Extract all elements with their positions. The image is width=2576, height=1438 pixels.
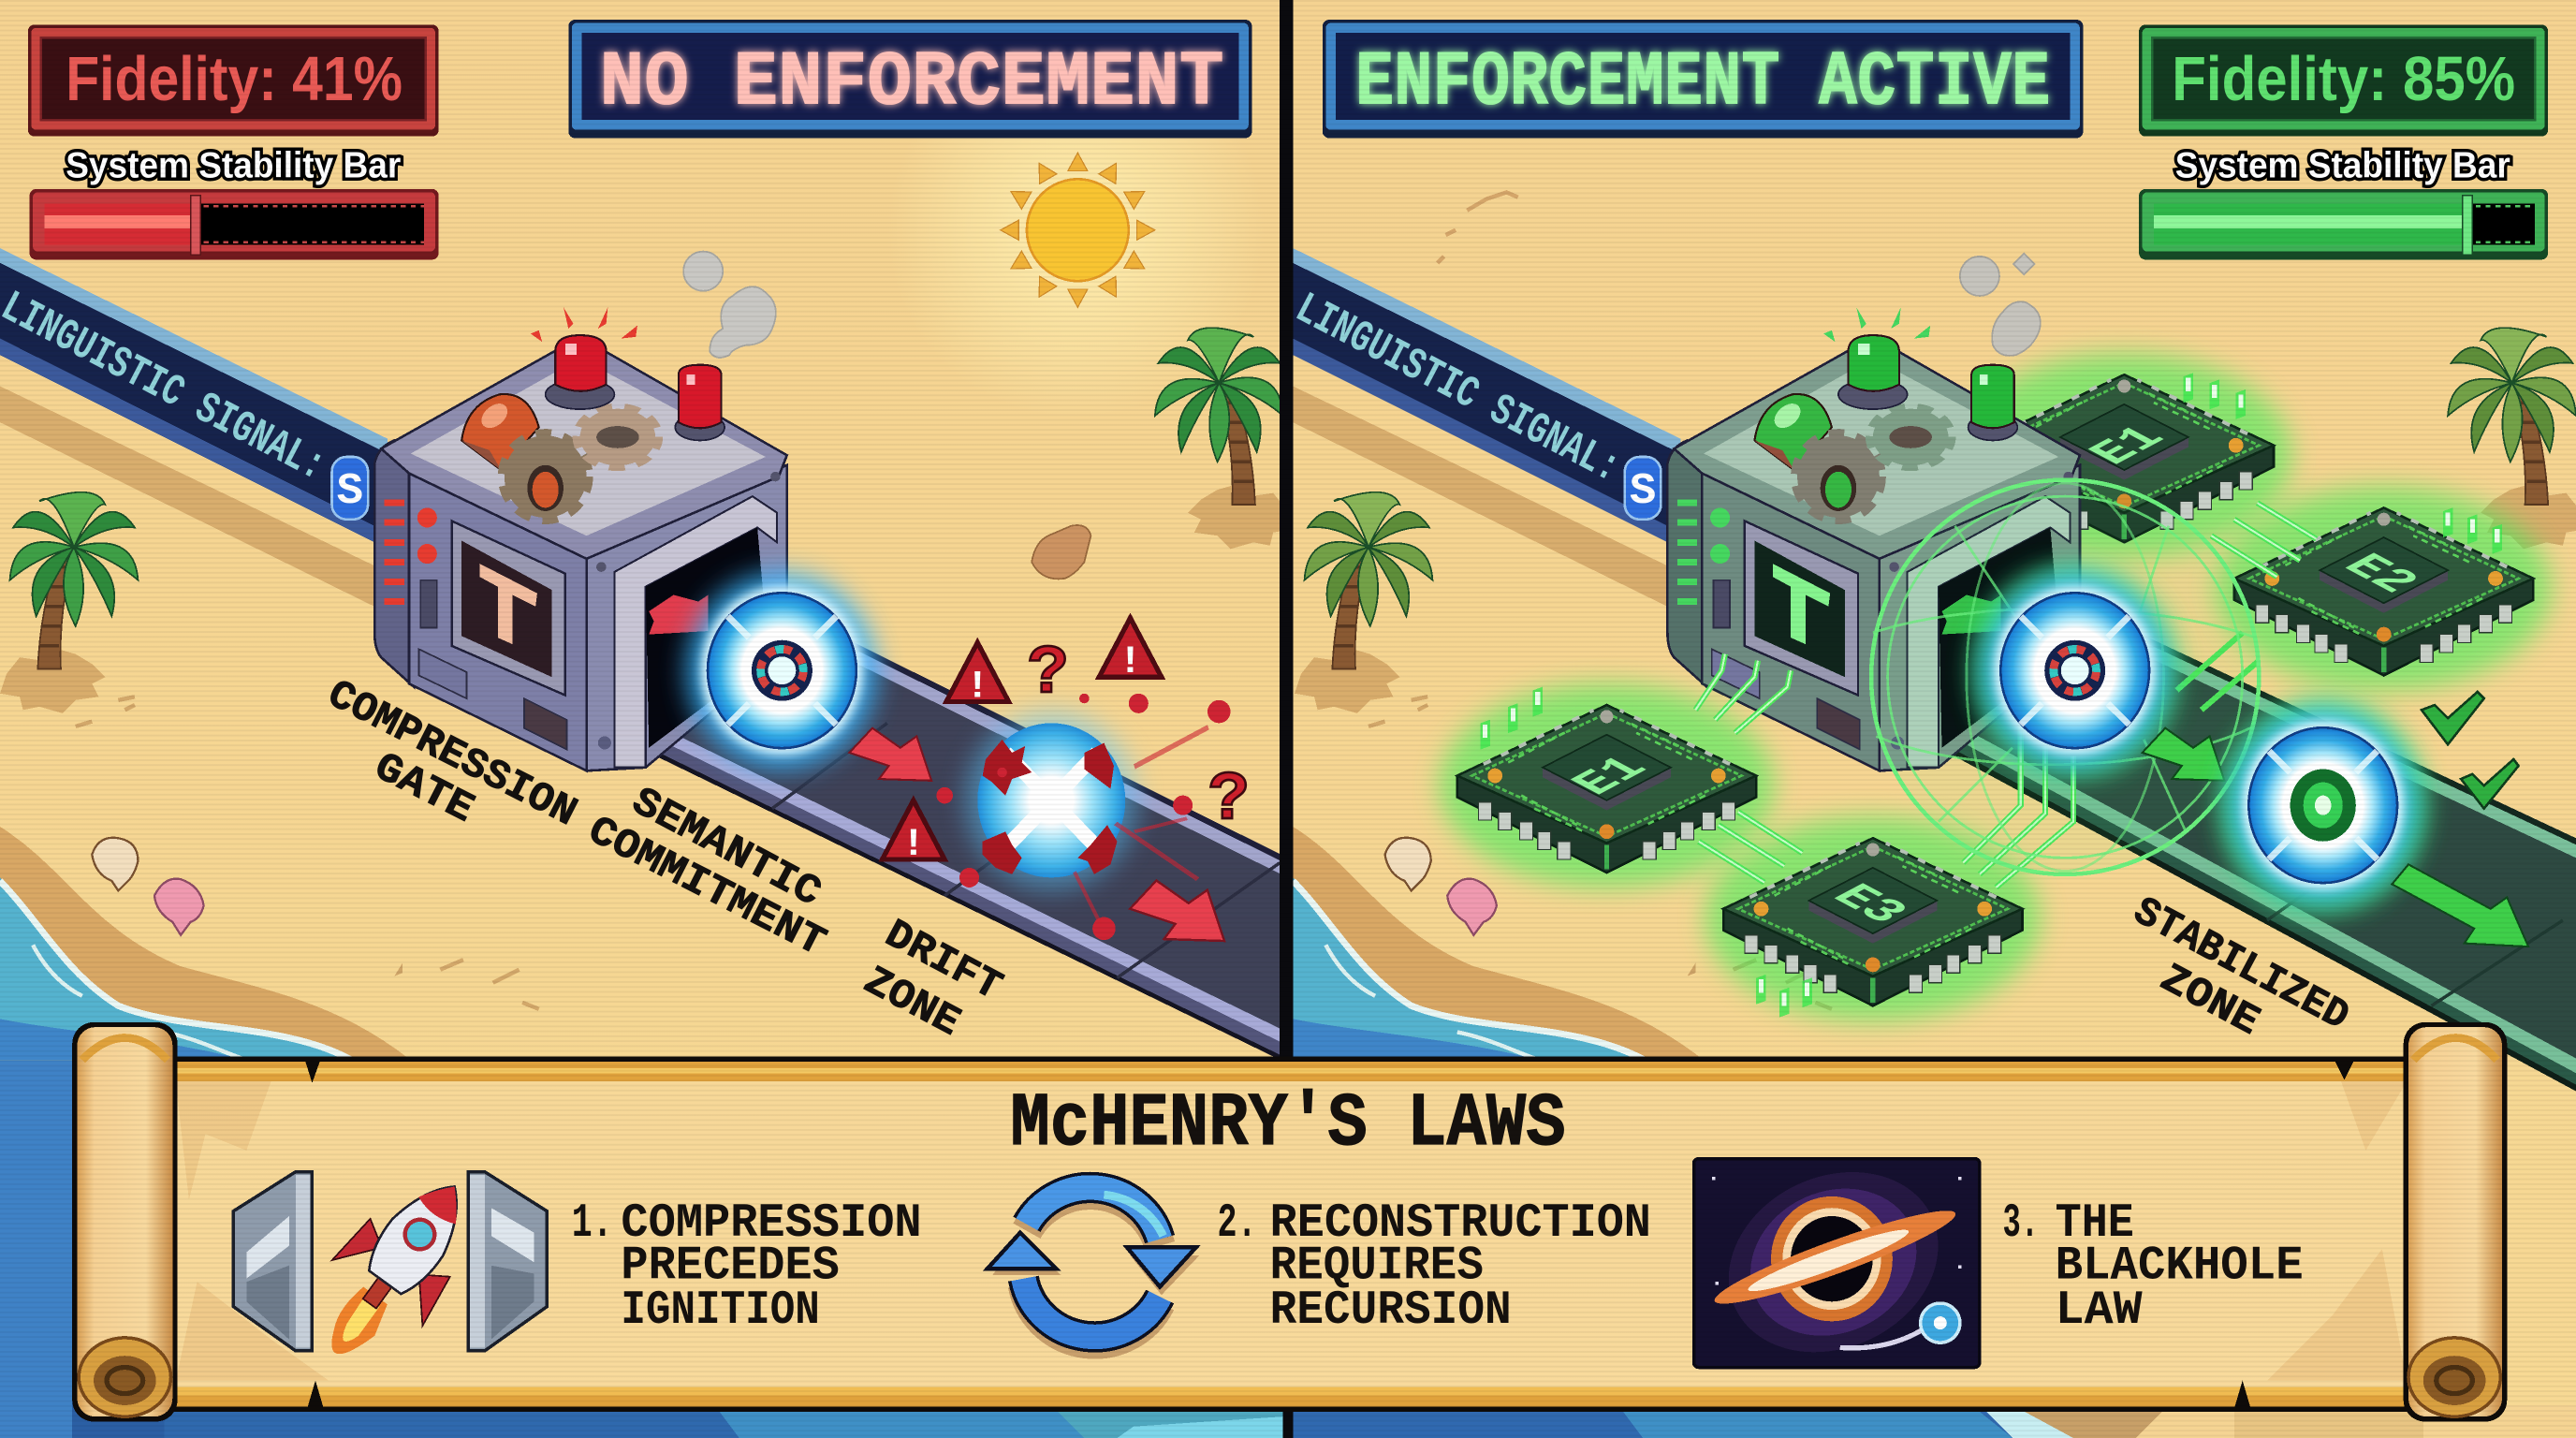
signal band shadow <box>1293 387 1687 616</box>
stability bar red <box>30 189 439 259</box>
signal orb <box>1973 565 2177 776</box>
drift arrow lower <box>1130 880 1224 941</box>
panel: no enforcement <box>0 20 1314 1077</box>
chip top E1: E1 <box>2077 418 2179 473</box>
rock <box>1032 525 1090 579</box>
law 3 text <box>2002 1197 2304 1338</box>
stabilized orb <box>2221 700 2425 911</box>
check mark lower <box>2461 759 2519 809</box>
conveyor belt <box>1942 541 2576 1092</box>
S badge: S <box>1630 467 1656 517</box>
S badge <box>1625 457 1661 520</box>
smoke puffs <box>1960 254 2041 356</box>
icon: compression doors and rocket <box>233 1153 547 1385</box>
check mark upper <box>2422 692 2484 744</box>
sun <box>930 139 1221 374</box>
parchment body <box>165 1057 2419 1412</box>
stability label: System Stability Bar <box>66 146 401 186</box>
fidelity box red <box>28 24 439 137</box>
palm tree left <box>0 492 138 713</box>
chip right E2 <box>2217 487 2552 690</box>
chip right E2: E2 <box>2329 547 2431 601</box>
law 2 text: RECONSTRUCTION <box>1270 1197 1651 1251</box>
law 3 text: 3. <box>2002 1197 2039 1251</box>
left door <box>233 1172 312 1351</box>
warning triangle bottom <box>882 800 944 867</box>
label: stabilized zone: ZONE <box>2152 956 2267 1047</box>
palm tree right <box>2448 328 2576 549</box>
label: drift zone: DRIFT <box>877 912 1009 1011</box>
label: drift zone <box>863 917 1005 1035</box>
green connection wires <box>1695 503 2317 888</box>
green arrow lower <box>2392 864 2528 946</box>
ocean below scroll <box>0 1060 2576 1438</box>
warning triangle right <box>1099 618 1162 684</box>
reconstruction sphere wireframe <box>1871 480 2259 874</box>
center divider <box>1280 0 1293 1438</box>
S badge <box>332 457 368 520</box>
law 1 text: COMPRESSION <box>621 1197 922 1251</box>
red debris droplets <box>936 694 1231 940</box>
title: no enforcement <box>568 20 1251 138</box>
shattered orb <box>966 712 1137 889</box>
law 2 text: REQUIRES <box>1270 1240 1484 1294</box>
law 1 text: 1. <box>572 1197 613 1251</box>
drift arrow upper <box>849 728 931 781</box>
scroll: McHenry's Laws <box>72 1022 2507 1421</box>
compression gate machine <box>374 307 787 770</box>
law 3 text: BLACKHOLE <box>2056 1240 2304 1294</box>
question mark right: ? <box>1208 762 1250 840</box>
smoke puffs <box>683 252 776 358</box>
label: stabilized zone: STABILIZED <box>2126 888 2356 1041</box>
label: semantic commitment: COMMITMENT <box>580 808 833 967</box>
left roller <box>72 1022 178 1421</box>
chip bottom E3: E3 <box>1819 877 1920 932</box>
signal text: LINGUISTIC SIGNAL: <box>1287 285 1628 494</box>
warning triangle left <box>946 642 1009 709</box>
palm tree right <box>1155 328 1293 549</box>
law 1 text: IGNITION <box>621 1284 820 1338</box>
law 3 text: THE <box>2056 1197 2134 1251</box>
law 2 text <box>1218 1197 1651 1338</box>
law 2 text: RECURSION <box>1270 1284 1512 1338</box>
rocket <box>289 1153 500 1385</box>
fidelity value: Fidelity: 85% <box>2172 45 2515 114</box>
signal band shadow <box>0 387 394 616</box>
title text: ENFORCEMENT ACTIVE <box>1355 39 2050 127</box>
stability label: System Stability Bar <box>2175 146 2510 186</box>
law 3 text: LAW <box>2056 1284 2143 1338</box>
linguistic signal band <box>1287 248 1680 549</box>
panel: enforcement active <box>1287 20 2576 1092</box>
chip bottom E3 <box>1705 816 2041 1020</box>
scroll title: McHENRY'S LAWS <box>1010 1082 1566 1167</box>
right door <box>468 1172 547 1351</box>
fidelity box green <box>2139 24 2548 137</box>
compression gate machine green <box>1667 307 2080 770</box>
label: semantic commitment: SEMANTIC <box>623 779 828 917</box>
title: enforcement active <box>1323 20 2083 138</box>
label: compression gate: GATE <box>366 744 481 833</box>
warning triangle bottom: ! <box>901 822 925 867</box>
chip top E1 <box>1956 353 2291 557</box>
label: drift zone: ZONE <box>856 958 968 1047</box>
conveyor belt <box>659 642 1280 1056</box>
question mark top: ? <box>1028 636 1069 713</box>
beach shoreline and shells <box>1293 697 1832 1060</box>
fidelity value: Fidelity: 41% <box>66 45 402 114</box>
law 2 text: 2. <box>1218 1197 1257 1251</box>
law 1 text: PRECEDES <box>621 1240 840 1294</box>
footprints in sand <box>1438 192 1518 263</box>
right roller <box>2404 1022 2507 1421</box>
chip left E1: E1 <box>1559 749 1661 803</box>
S badge: S <box>337 467 363 517</box>
warning triangle right: ! <box>1119 639 1142 684</box>
law 1 text <box>572 1197 922 1338</box>
beach shoreline and shells <box>0 697 539 1060</box>
signal orb intact <box>687 572 877 770</box>
stability bar green <box>2139 189 2548 259</box>
label: compression gate: COMPRESSION <box>320 671 584 837</box>
chip sparks <box>1480 373 2502 1018</box>
warning triangle left: ! <box>966 664 989 709</box>
icon: recursion arrows <box>988 1187 1199 1343</box>
icon: black hole <box>1694 1138 1980 1386</box>
palm tree left <box>1295 492 1432 713</box>
signal text: LINGUISTIC SIGNAL: <box>0 283 333 492</box>
chip left E1 <box>1439 683 1775 888</box>
green arrow upper <box>2143 728 2224 781</box>
title text: NO ENFORCEMENT <box>600 39 1224 127</box>
linguistic signal band <box>0 248 388 549</box>
